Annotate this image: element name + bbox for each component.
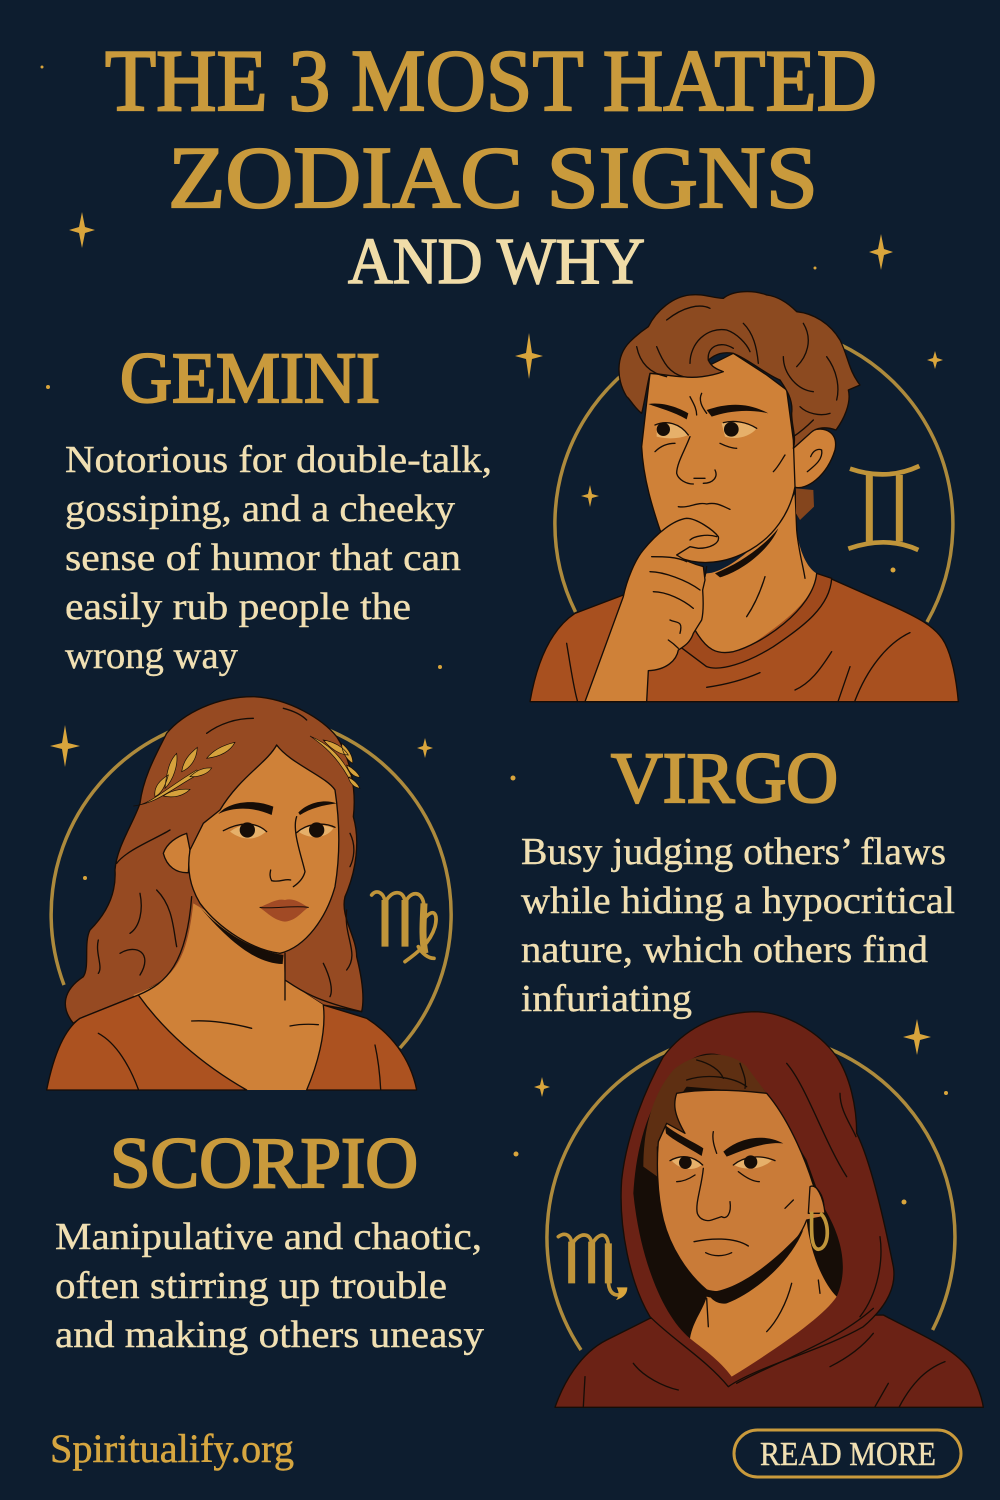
text: Gemini description: wrong way <box>65 635 238 677</box>
face <box>657 1090 824 1292</box>
illustration: Scorpio hooded figure <box>547 1012 983 1407</box>
eyes <box>657 422 757 438</box>
text: Gemini description: sense of humor that can <box>65 537 461 579</box>
hair <box>65 697 363 1023</box>
brand: Spiritualify.org: Spiritualify.org <box>50 1426 294 1471</box>
hair <box>619 292 860 448</box>
eyes <box>672 1157 772 1169</box>
title: ZODIAC SIGNS <box>168 130 818 227</box>
neck <box>695 493 817 653</box>
hair strands <box>98 708 354 997</box>
text: Virgo description: Busy judging others’ flaws <box>521 831 946 873</box>
hoodie body <box>555 1315 983 1407</box>
hand <box>585 518 719 702</box>
face <box>642 353 795 562</box>
text: Scorpio description <box>55 1216 484 1356</box>
heading: Scorpio: SCORPIO <box>110 1123 418 1203</box>
ear <box>792 429 836 488</box>
face <box>189 745 339 953</box>
lips <box>259 899 308 922</box>
button: read more <box>734 1430 961 1477</box>
icon: Scorpio symbol <box>558 1234 627 1300</box>
text: Gemini description: Notorious for double-talk, <box>65 439 492 481</box>
text: Virgo description: infuriating <box>521 978 692 1020</box>
collar <box>680 573 832 668</box>
hair <box>643 1055 812 1197</box>
shirt <box>530 578 958 702</box>
brows <box>665 1125 783 1157</box>
text: Scorpio description: and making others uneasy <box>55 1314 484 1356</box>
eyes <box>230 825 333 839</box>
text: Scorpio description: Manipulative and chaotic, <box>55 1216 482 1258</box>
brows <box>218 801 337 815</box>
ear <box>163 833 190 873</box>
text: Gemini description: gossiping, and a cheeky <box>65 488 455 530</box>
ear and earring <box>808 1186 825 1213</box>
title <box>105 33 877 298</box>
icon: Virgo symbol <box>372 892 436 962</box>
button: read more: READ MORE <box>760 1436 936 1473</box>
text: Gemini description: easily rub people the <box>65 586 411 628</box>
nose and mouth <box>677 437 730 509</box>
text: Virgo description <box>521 831 955 1020</box>
text: Virgo description: nature, which others find <box>521 929 928 971</box>
laurel <box>133 736 360 806</box>
hood <box>621 1012 894 1387</box>
nose and mouth <box>694 1168 748 1256</box>
nose <box>270 817 305 887</box>
jaw shadow <box>707 1230 803 1304</box>
back hair <box>796 488 814 520</box>
illustration: Gemini man <box>530 292 958 702</box>
heading: Virgo: VIRGO <box>611 738 838 818</box>
brows <box>648 404 768 419</box>
hood interior <box>633 1053 843 1338</box>
text: Scorpio description: often stirring up trouble <box>55 1265 447 1307</box>
dress <box>47 995 247 1090</box>
icon: Gemini symbol <box>848 466 919 550</box>
illustration: Virgo woman <box>47 697 451 1090</box>
chest <box>133 903 330 1090</box>
title: THE 3 MOST HATED <box>105 33 877 130</box>
title: AND WHY <box>348 225 645 298</box>
heading: Gemini: GEMINI <box>120 338 380 418</box>
jaw shadow <box>197 903 283 964</box>
neck <box>690 1220 837 1377</box>
background stars <box>40 66 948 1204</box>
text: Gemini description <box>65 439 492 677</box>
text: Virgo description: while hiding a hypocritical <box>521 880 955 922</box>
